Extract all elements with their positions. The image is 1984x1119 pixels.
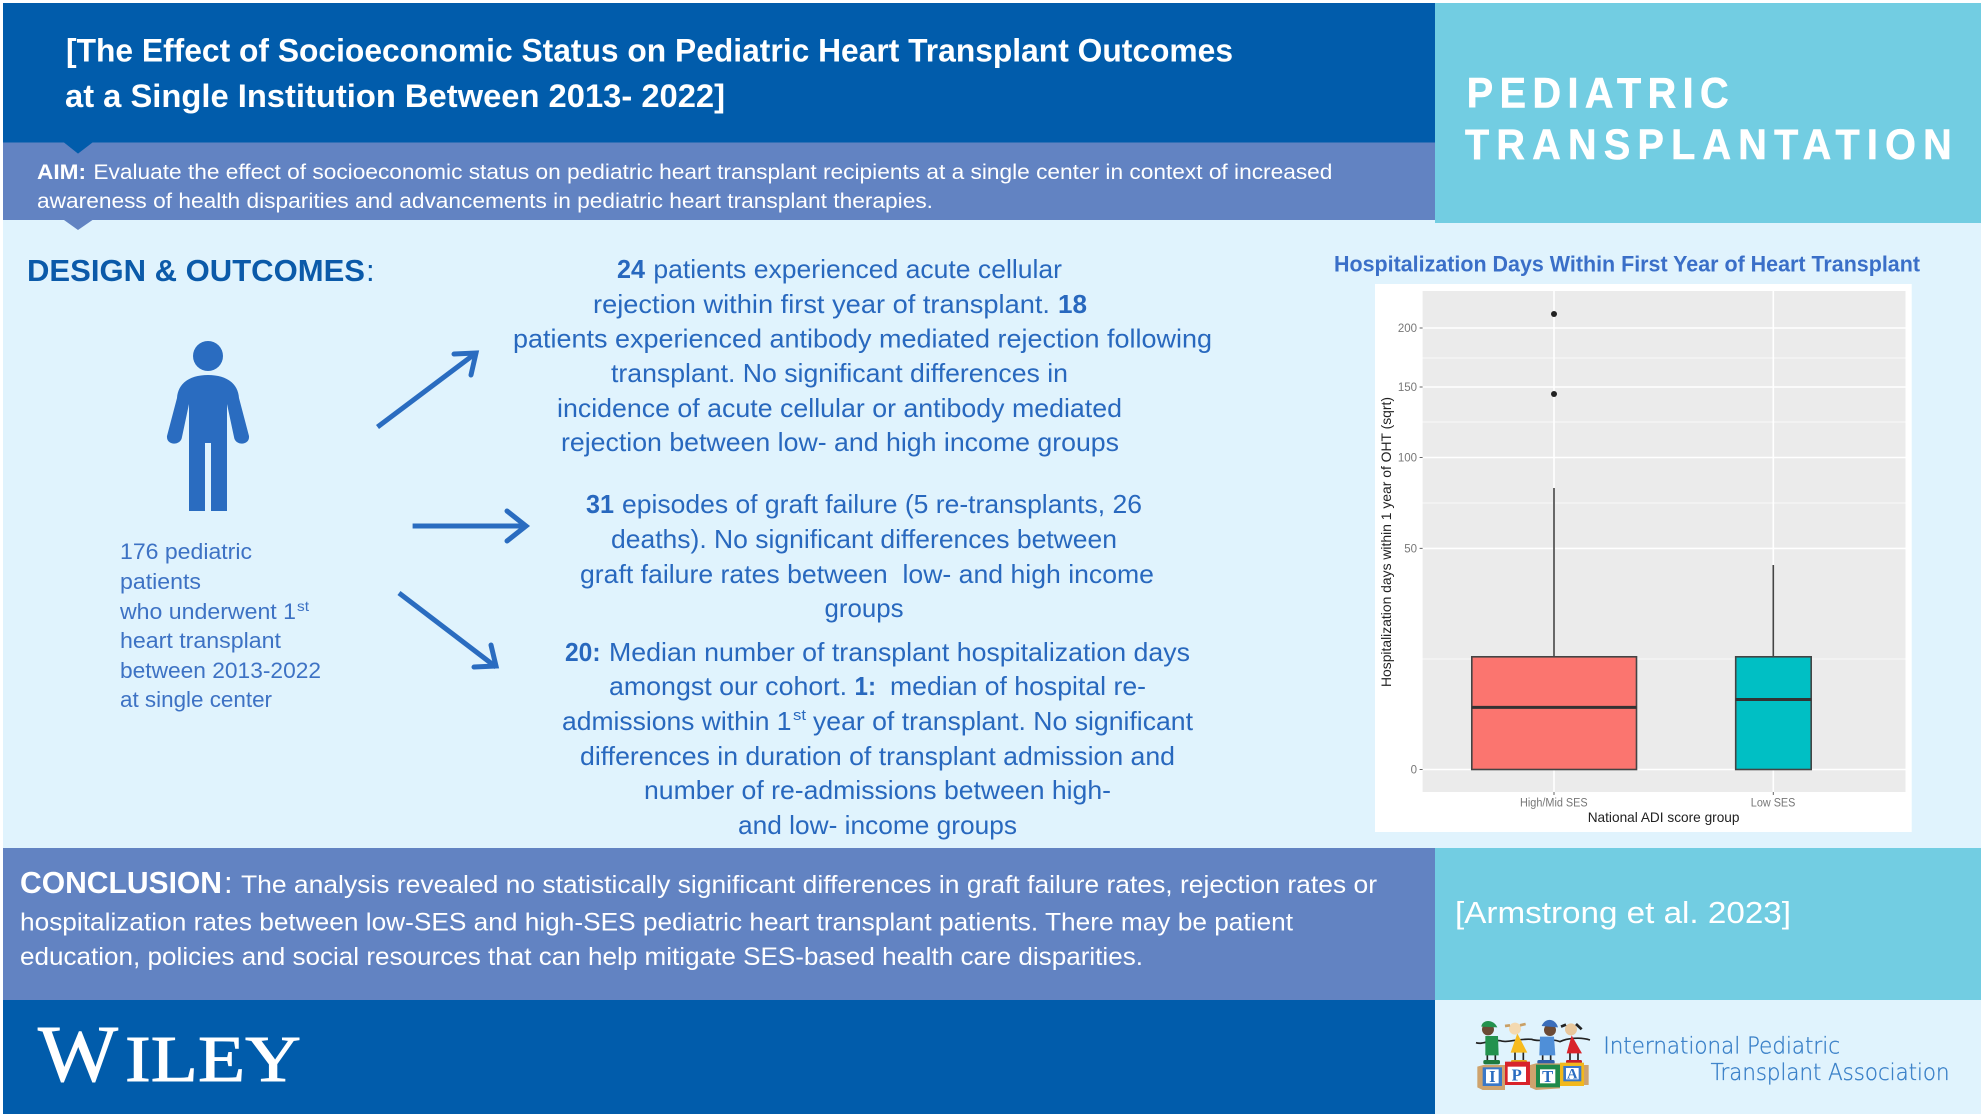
text: hospitalization outcomes: and low- income groups <box>738 810 1017 840</box>
text: patient cohort: between 2013-2022 <box>120 658 321 683</box>
text: conclusion: The analysis revealed no statistically significant differences in graft failure rates, rejection rates or <box>241 871 1377 899</box>
text: graft failure outcomes: episodes of graft failure (5 re-transplants, 26 <box>622 489 1142 519</box>
title <box>65 32 1233 114</box>
text: rejection outcomes <box>513 254 1212 457</box>
y axis tick labels: 50 <box>1404 544 1417 556</box>
text: patient cohort: heart transplant <box>120 628 282 653</box>
text: patient cohort: at single center <box>120 687 273 712</box>
x axis tick labels: High/Mid SES <box>1520 798 1588 810</box>
text: conclusion <box>20 865 1377 971</box>
text: aim statement: awareness of health disparities and advancements in pediatric heart transplant therapies. <box>37 189 933 213</box>
text: patient cohort <box>119 539 321 712</box>
text: conclusion: CONCLUSION <box>20 865 222 900</box>
heading: design and outcomes: DESIGN & OUTCOMES <box>27 253 365 288</box>
text: hospitalization outcomes <box>562 637 1194 840</box>
text: patient cohort: who underwent 1 <box>119 599 296 624</box>
text: hospitalization outcomes: differences in duration of transplant admission and <box>580 741 1175 771</box>
box: low SES <box>1736 565 1811 770</box>
y axis title: Hospitalization days within 1 year of OHT (sqrt) <box>1378 397 1394 687</box>
panel: aim band <box>3 142 1435 230</box>
text: conclusion: hospitalization rates between low-SES and high-SES pediatric heart transplant patients. There may be patient <box>20 909 1293 937</box>
heading: design and outcomes: : <box>366 253 375 288</box>
text: hospitalization outcomes: st <box>793 707 807 724</box>
logo: International Pediatric Transplant Association <box>1476 1020 1950 1090</box>
arrow: to hospitalization outcomes <box>399 593 496 667</box>
box: high/mid SES <box>1472 311 1636 770</box>
text: citation: [Armstrong et al. 2023] <box>1455 895 1791 930</box>
arrow: to graft failure outcomes <box>413 511 526 541</box>
icon: children on blocks: A <box>1567 1067 1578 1083</box>
text: rejection outcomes: rejection between low- and high income groups <box>561 427 1119 457</box>
text: rejection outcomes: 24 <box>617 254 646 284</box>
icon: children on blocks: I <box>1489 1067 1496 1086</box>
text: patient cohort: patients <box>120 569 201 594</box>
text: graft failure outcomes: deaths). No significant differences between <box>611 524 1117 554</box>
text: rejection outcomes: patients experienced antibody mediated rejection following <box>513 324 1212 354</box>
y axis tick labels: 200 <box>1398 323 1417 335</box>
panel: journal name <box>1435 3 1981 223</box>
icon: person <box>167 341 249 511</box>
heading: journal name <box>1465 69 1952 168</box>
text: aim statement: Evaluate the effect of socioeconomic status on pediatric heart transplant recipients at a single center in context of increased <box>93 160 1332 184</box>
logo: Wiley: ILEY <box>125 1023 301 1096</box>
text: conclusion: : <box>224 865 233 900</box>
icon: children on blocks: T <box>1542 1067 1553 1086</box>
logo: Wiley <box>38 1009 301 1099</box>
text: hospitalization outcomes: admissions within 1 <box>562 706 792 736</box>
y axis tick labels: 150 <box>1398 382 1417 394</box>
y axis tick labels: 100 <box>1398 452 1417 464</box>
text: hospitalization outcomes: Median number of transplant hospitalization days <box>609 637 1190 667</box>
y axis tick labels <box>1398 323 1417 776</box>
text: rejection outcomes: rejection within first year of transplant. <box>593 289 1050 319</box>
text: patient cohort: 176 pediatric <box>120 539 252 564</box>
x axis title: National ADI score group <box>1588 809 1740 825</box>
title: [The Effect of Socioeconomic Status on Pediatric Heart Transplant Outcomes <box>66 32 1233 68</box>
text: rejection outcomes: transplant. No significant differences in <box>611 358 1068 388</box>
icon: children on blocks <box>1476 1020 1590 1090</box>
heading: journal name: PEDIATRIC <box>1467 69 1729 117</box>
chart: hospitalization days box plot <box>1375 284 1912 832</box>
text: rejection outcomes: 18 <box>1058 289 1087 319</box>
text: hospitalization outcomes: year of transplant. No significant <box>813 706 1194 736</box>
heading: journal name: TRANSPLANTATION <box>1465 120 1952 168</box>
pointer: title to aim <box>64 142 92 154</box>
logo: Wiley: W <box>38 1009 119 1099</box>
title: at a Single Institution Between 2013- 2022] <box>65 78 725 114</box>
text: association name <box>1603 1033 1950 1086</box>
text: aim statement <box>37 160 1332 213</box>
pointer: aim to design <box>64 220 92 230</box>
heading: chart title: Hospitalization Days Within First Year of Heart Transplant <box>1334 252 1921 277</box>
text: hospitalization outcomes: 1: <box>854 671 876 701</box>
y axis tick labels: 0 <box>1411 764 1417 776</box>
text: association name: International Pediatric <box>1603 1033 1840 1059</box>
x axis tick labels <box>1520 798 1796 810</box>
panel: conclusion <box>3 848 1435 1000</box>
text: conclusion: education, policies and social resources that can help mitigate SES-based health care disparities. <box>20 943 1143 971</box>
panel: title band <box>3 3 1435 142</box>
arrow: to rejection outcomes <box>378 353 476 427</box>
text: hospitalization outcomes: amongst our cohort. <box>609 671 847 701</box>
panel: publisher band <box>3 1000 1435 1114</box>
text: patient cohort: st <box>297 598 309 614</box>
text: rejection outcomes: patients experienced acute cellular <box>653 254 1062 284</box>
text: graft failure outcomes: groups <box>824 593 904 623</box>
text: association name: Transplant Association <box>1711 1060 1950 1086</box>
text: graft failure outcomes: 31 <box>586 489 614 519</box>
text: rejection outcomes: incidence of acute cellular or antibody mediated <box>557 393 1122 423</box>
text: graft failure outcomes <box>580 489 1154 623</box>
text: hospitalization outcomes: 20: <box>565 637 600 667</box>
text: hospitalization outcomes: number of re-admissions between high- <box>644 775 1111 805</box>
icon: children on blocks: P <box>1512 1066 1522 1085</box>
text: hospitalization outcomes: median of hospital re- <box>890 671 1146 701</box>
text: graft failure outcomes: graft failure rates between low- and high income <box>580 559 1154 589</box>
text: aim statement: AIM: <box>37 160 86 184</box>
x axis tick labels: Low SES <box>1751 798 1796 810</box>
panel: citation <box>1435 848 1981 1000</box>
